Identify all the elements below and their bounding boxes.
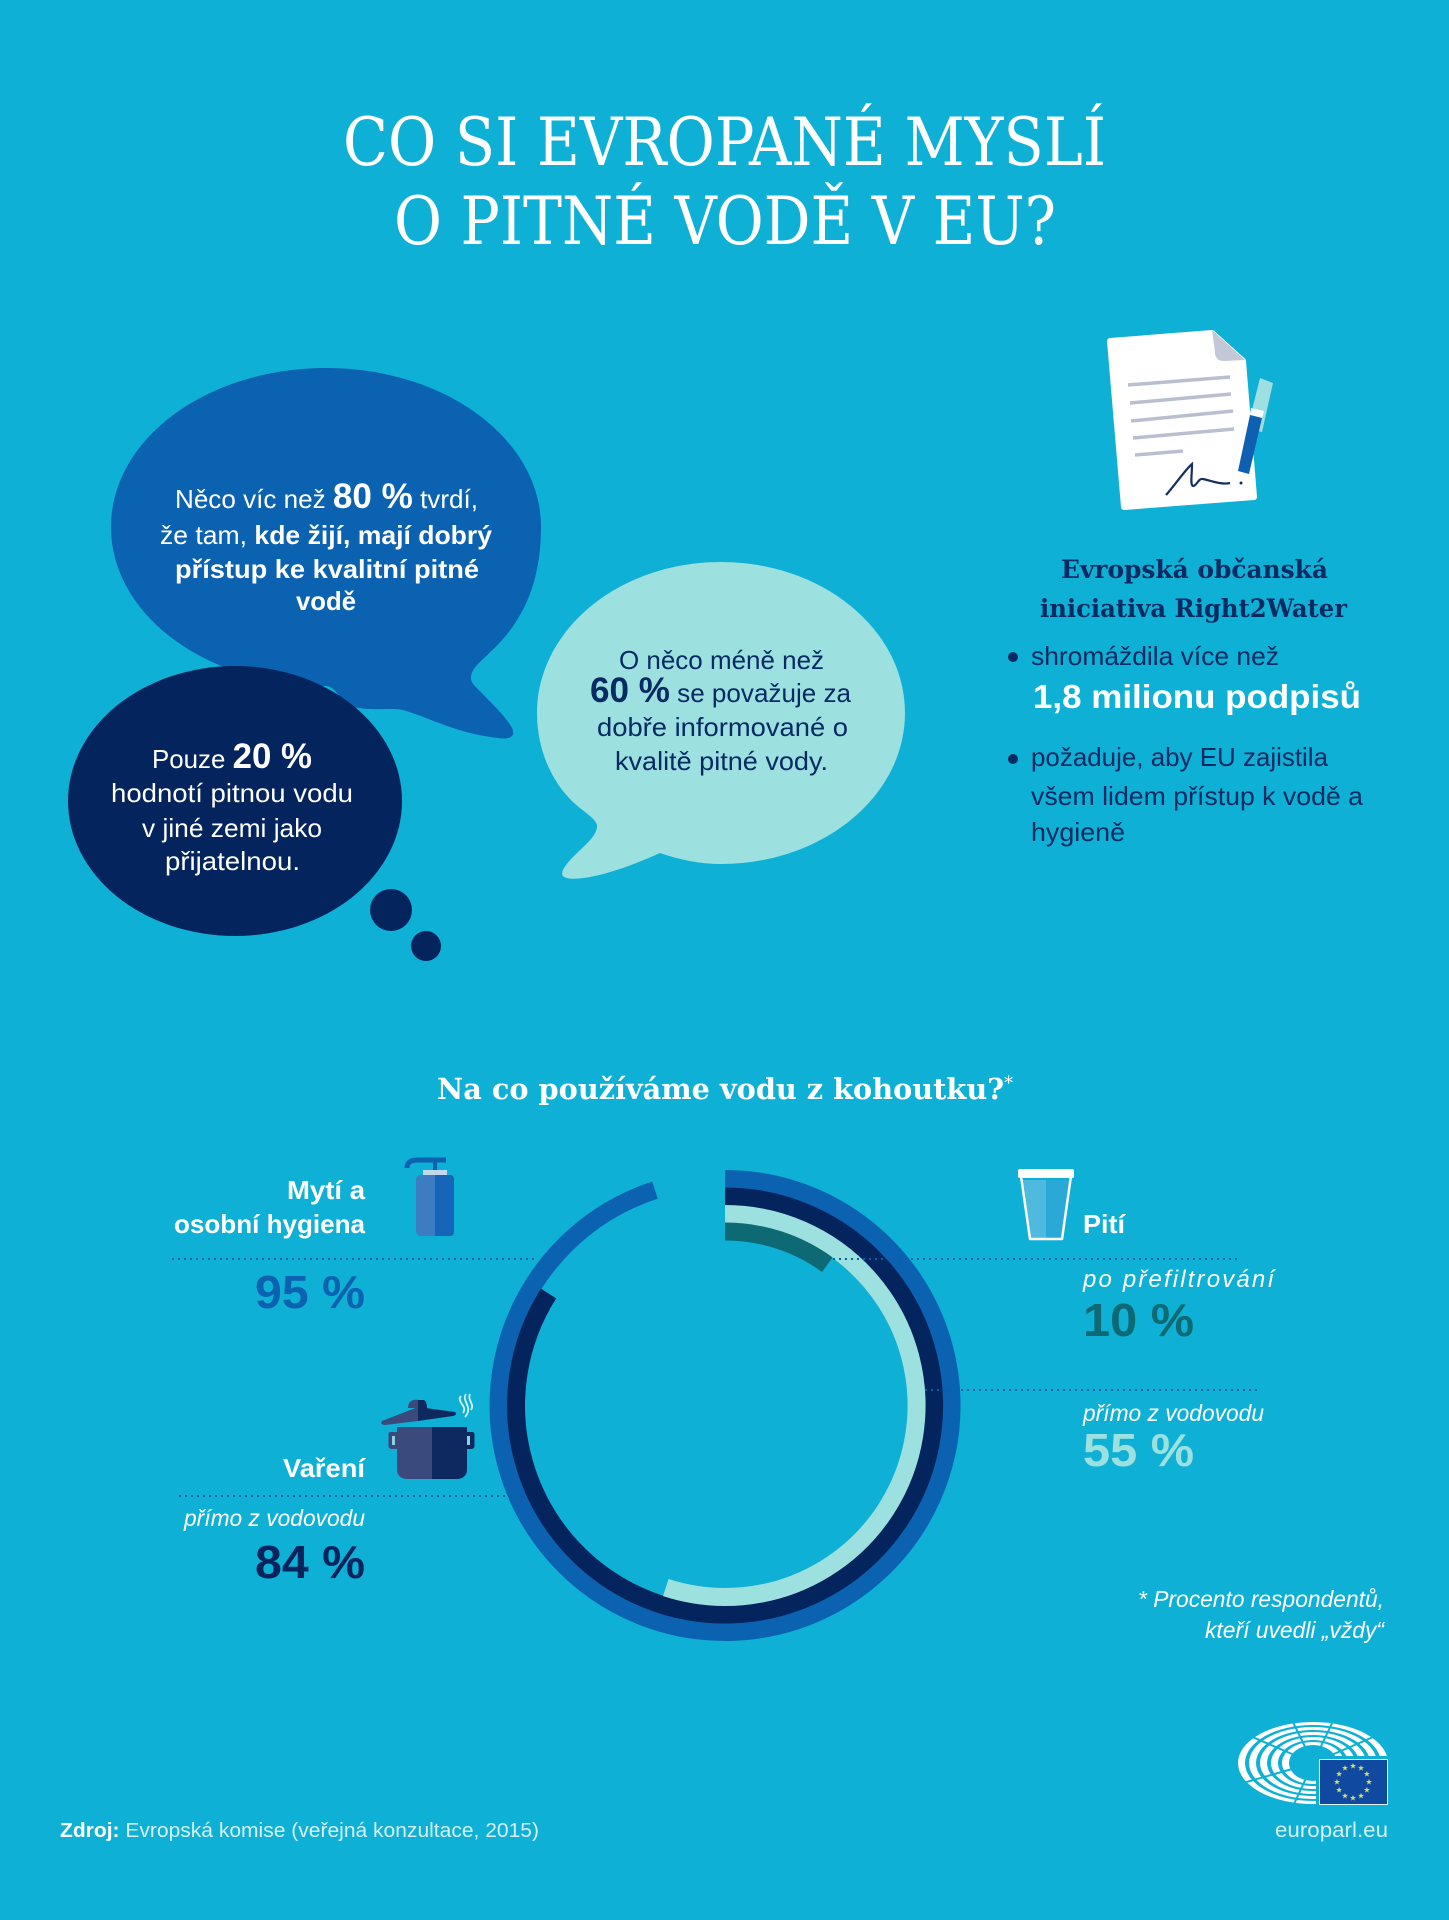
panel: drinking (1018, 1169, 1276, 1476)
panel: opinion bubbles (68, 368, 905, 961)
title: CO SI EVROPANÉ MYSLÍ (343, 104, 1106, 181)
bullet list: shromáždila více než (1031, 641, 1279, 671)
speech bubble: 80 % access (111, 368, 541, 739)
panel: cooking: přímo z vodovodu (183, 1505, 365, 1531)
speech bubble: 80 % access: že tam, kde žijí, mají dobrý (160, 520, 493, 550)
speech bubble: 60 % informed: O něco méně než (619, 645, 824, 675)
bullet list: požaduje, aby EU zajistila (1031, 742, 1329, 772)
thought bubble: 20 % elsewhere: v jiné zemi jako (142, 813, 322, 843)
panel: drinking: 55 % (1083, 1424, 1194, 1476)
panel: drinking: Pití (1083, 1209, 1126, 1239)
EU flag (1320, 1760, 1388, 1804)
speech bubble: 80 % access: Něco víc než 80 % tvrdí, (175, 477, 478, 516)
heading: iniciativa Right2Water (1040, 594, 1348, 623)
panel: drinking: přímo z vodovodu (1082, 1400, 1264, 1426)
source: Zdroj: Evropská komise (veřejná konzultace, 2015) (60, 1820, 539, 1842)
icon: glass of water (1018, 1169, 1074, 1239)
panel: drinking: po přefiltrování (1082, 1266, 1276, 1293)
footnote: * Procento respondentů, (1138, 1586, 1384, 1612)
panel: cooking: Vaření (283, 1453, 366, 1483)
title: O PITNÉ VODĚ V EU? (394, 183, 1056, 260)
panel: washing: 95 % (255, 1266, 365, 1318)
icon: pot with steam (381, 1394, 474, 1479)
icon: soap dispenser (407, 1160, 454, 1236)
speech bubble: 60 % informed (537, 562, 905, 879)
speech bubble: 60 % informed: dobře informované o (597, 712, 848, 742)
section heading: * (1004, 1073, 1013, 1094)
speech bubble: 60 % informed: kvalitě pitné vody. (615, 746, 828, 776)
ring chart (499, 1179, 952, 1632)
bullet list (1008, 641, 1364, 847)
panel: drinking: 10 % (1083, 1294, 1194, 1346)
bullet list: hygieně (1031, 817, 1125, 847)
panel: cooking (183, 1394, 474, 1588)
bullet list: 1,8 milionu podpisů (1033, 678, 1361, 715)
ring: cooking 84 % (516, 1196, 934, 1614)
icon: signed document with pen (1110, 330, 1273, 507)
website: europarl.eu (1275, 1819, 1388, 1842)
ring: drinking filtered 10 % (725, 1232, 827, 1265)
panel: Right2Water initiative (1008, 555, 1364, 847)
speech bubble: 80 % access: vodě (296, 586, 356, 616)
speech bubble: 60 % informed: 60 % se považuje za (590, 671, 852, 710)
panel: washing: osobní hygiena (174, 1209, 366, 1239)
thought bubble: 20 % elsewhere: přijatelnou. (165, 846, 300, 876)
logo: European Parliament (1229, 1714, 1406, 1842)
speech bubble: 80 % access: přístup ke kvalitní pitné (175, 554, 479, 584)
leader lines (172, 1259, 1259, 1496)
ring: drinking tap 55 % (666, 1214, 917, 1597)
ring: washing 95 % (499, 1179, 952, 1632)
footnote: kteří uvedli „vždy“ (1205, 1617, 1385, 1643)
bullet list: všem lidem přístup k vodě a (1031, 781, 1364, 811)
panel: washing (174, 1160, 454, 1318)
heading (1040, 555, 1348, 623)
panel: cooking: 84 % (255, 1536, 365, 1588)
thought bubble: 20 % elsewhere (68, 666, 441, 961)
hemicycle (1229, 1714, 1406, 1815)
thought bubble: 20 % elsewhere: hodnotí pitnou vodu (111, 778, 353, 808)
heading: Evropská občanská (1061, 555, 1328, 584)
section heading: Na co používáme vodu z kohoutku? (437, 1072, 1009, 1106)
panel: washing: Mytí a (287, 1175, 366, 1205)
thought bubble: 20 % elsewhere: Pouze 20 % (152, 737, 312, 776)
footnote (1138, 1586, 1385, 1643)
title (343, 104, 1106, 260)
